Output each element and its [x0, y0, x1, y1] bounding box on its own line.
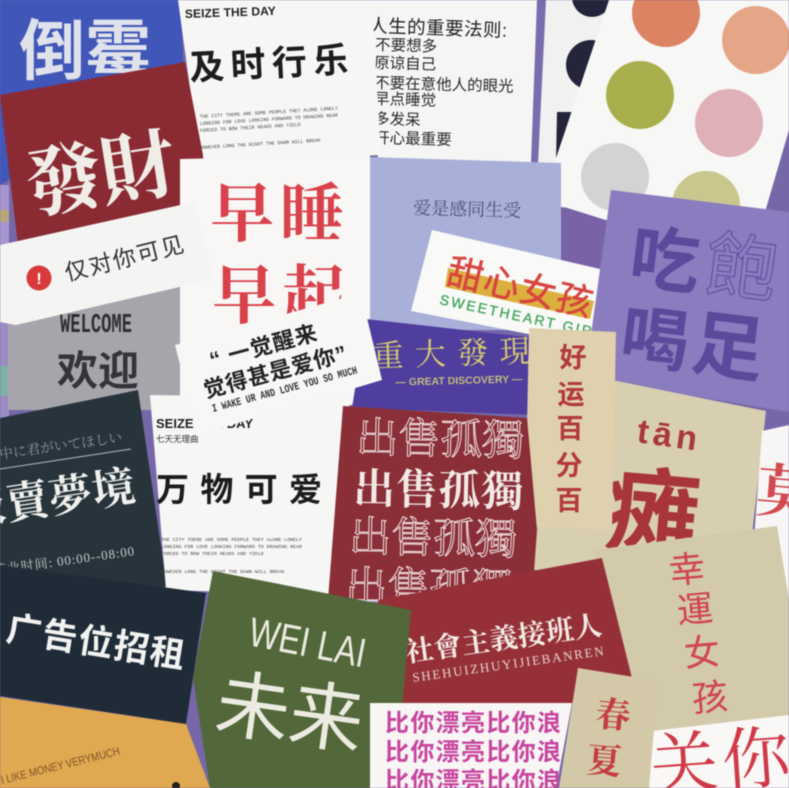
label: 七天无理曲: 七天无理曲 [156, 434, 199, 444]
text block: small print: THE CITY THERE ARE SOME PEOPLE THEY ALONE LONELY [161, 537, 302, 543]
text: vertical 好运百分百: 好 [560, 343, 586, 373]
heading: 倒霉: 倒霉 [19, 14, 151, 88]
label: SEIZE THE DAY: SEIZE THE DAY [185, 4, 276, 21]
card: white 万物可爱 [150, 395, 350, 595]
text block: rules list: 多发呆 [374, 110, 421, 129]
divider line [0, 449, 131, 469]
card: green 未来 [193, 571, 411, 788]
text: pink rows [385, 709, 561, 788]
text: I LIKE MONEY VERYMUCH: I LIKE MONEY VERYMUCH [0, 746, 121, 787]
text: I WAKE UR AND LOVE YOU SO MUCH: I WAKE UR AND LOVE YOU SO MUCH [211, 365, 359, 416]
text block: small print: HOWEVER LONG THE NIGHT THE DAWN WILL BREAK [200, 138, 321, 151]
text block: small print: LONGING FOR LOVE LOOKING FORWARD TO DRAWING NEAR [161, 544, 302, 550]
card: SEIZE THE DAY 及时行乐 [178, 0, 381, 162]
text: outline row 3: 出售孤獨 [349, 514, 518, 564]
text: 吃: 吃 [625, 218, 704, 304]
dot: orange [632, 0, 700, 47]
card: red 發財 [0, 62, 205, 245]
text: 爱是感同生受: 爱是感同生受 [413, 198, 521, 221]
heading: 重大發現: 重大發現 [372, 334, 531, 374]
text block: rules list: 开心最重要 [374, 129, 452, 149]
text: vertical 好运百分百 [556, 343, 586, 516]
card: dark teal 販賣夢境 [0, 390, 167, 590]
label: SEIZE: SEIZE THE DAY [156, 416, 253, 431]
card: red 社會主義接班人 [378, 558, 636, 705]
text: 春: 春 [594, 695, 632, 736]
text: pink rows: 比你漂亮比你浪 [385, 738, 561, 766]
text block: small print: THE CITY THERE ARE SOME PEOPLE THEY ALONE LONELY [200, 106, 338, 120]
heading: 及时行乐: 及时行乐 [188, 41, 349, 88]
text block: rules list: 不要想多 [375, 36, 437, 56]
label: WELCOME: WELCOME [60, 311, 132, 341]
heading: 早睡: 早睡 [210, 179, 344, 250]
text block: rules list [374, 36, 514, 149]
card: dark 广告位招租 [0, 565, 206, 724]
text: 一觉醒来: “ 一觉醒来 [207, 320, 320, 373]
card: tan 好运百分百 [525, 328, 616, 531]
text: pink rows: 比你漂亮比你浪 [385, 709, 561, 737]
heading: 广告位招租: 广告位招租 [4, 609, 188, 676]
text: vertical 好运百分百: 运 [558, 380, 584, 410]
card: blue 倒霉 [0, 0, 184, 185]
card: dark shapes [536, 0, 640, 212]
text block: rules list: 原谅自己 [374, 54, 436, 74]
text: solid row 2: 出售孤獨 [353, 466, 524, 516]
card: pink 比你漂亮 [370, 703, 572, 788]
label: GREAT DISCOVERY: — GREAT DISCOVERY — [395, 373, 523, 389]
heading: 万物可爱: 万物可爱 [156, 471, 322, 508]
card: orange I LIKE MONEY [0, 697, 210, 788]
text: vertical 幸運女孩: 幸 [667, 548, 707, 592]
card: coloured dots [542, 0, 789, 270]
card: white 仅对你可见 [0, 202, 214, 325]
card: white 一觉醒来 [175, 293, 382, 435]
text: tān: tān [635, 412, 700, 458]
text block: rules list: 早点睡觉 [374, 90, 436, 110]
card: red 出售孤獨 [328, 406, 537, 614]
text block: small print: FORCED TO BOW THEIR HEADS AND YIELD [200, 122, 301, 134]
text: vertical 好运百分百: 百 [556, 486, 582, 516]
dot: peach [722, 6, 789, 74]
label: SWEETHEART GIRL: SWEETHEART GIRL [438, 291, 603, 341]
card: SWEETHEART GIRL [411, 230, 603, 348]
text block: rules list: 不要在意他人的眼光 [374, 73, 514, 96]
card: tan 幸運女孩 [594, 526, 789, 733]
dot: pink [695, 89, 763, 157]
text: Japanese line: 中に君がいてほしい [0, 429, 123, 462]
dot: olive [606, 61, 674, 129]
card: purple 重大發現 [352, 319, 535, 415]
card: white right edge [740, 425, 789, 730]
text: 喝: 喝 [616, 298, 693, 382]
text: 觉得甚是爱你: 觉得甚是爱你” [201, 341, 349, 403]
card: white 早睡早起 [180, 155, 370, 405]
highlight band [445, 268, 594, 319]
text: vertical 幸運女孩: 運 [675, 588, 715, 632]
icon: red alert: ! [36, 271, 42, 288]
heading: 瘫: 瘫 [600, 458, 705, 573]
text: 仅对你可见: 仅对你可见 [62, 231, 187, 286]
text: outline row 1: 出售孤獨 [356, 415, 525, 465]
text: WEI LAI: WEI LAI [245, 609, 370, 676]
icon: dark circle middle [566, 40, 616, 90]
mark: dark blob [172, 782, 180, 788]
heading: 未来: 未来 [211, 662, 369, 764]
heading: 早起: 早起 [212, 261, 346, 332]
heading: 甜心女孩: 甜心女孩 [443, 251, 597, 324]
dot: grey [581, 143, 649, 211]
card: white 关你 [640, 715, 789, 788]
text: vertical 幸運女孩: 女 [682, 631, 722, 675]
card: rules of life [369, 0, 537, 163]
heading: 發財: 發財 [21, 122, 182, 229]
heading: 社會主義接班人: 社會主義接班人 [404, 610, 604, 669]
text: 饱 outline: 飽 [700, 225, 782, 313]
heading: 欢迎: 欢迎 [57, 348, 139, 394]
card: tan tān [532, 380, 766, 573]
text: vertical 幸運女孩: 孩 [690, 676, 730, 720]
text: outline row 4: 出售孤獨 [345, 564, 514, 614]
text: 足: 足 [687, 304, 769, 392]
text block: small print: FORCED TO BOW THEIR HEADS AND YIELD [161, 551, 264, 557]
text block: small print: HOWEVER LONG THE NIGHT THE DAWN WILL BREAK [161, 569, 284, 575]
card: grey WELCOME [8, 285, 181, 410]
text: 夏: 夏 [585, 741, 623, 782]
text: vertical 幸運女孩 [667, 548, 730, 720]
text: vertical 好运百分百: 分 [556, 451, 582, 481]
card: periwinkle 爱是感同生受 [368, 157, 561, 330]
card: purple 吃饱喝足 [585, 190, 789, 412]
text block: small print: LONGING FOR LOVE LOOKING FORWARD TO DRAWING NEAR [200, 113, 338, 127]
icon: dark circle top [572, 0, 612, 17]
icon: dark triangle [556, 112, 575, 162]
text block: small print [200, 106, 338, 151]
label: pinyin: SHEHUIZHUYIJIEBANREN [411, 643, 605, 685]
heading: rules: 人生的重要法则: [369, 15, 508, 41]
icon: red alert [26, 266, 52, 290]
text: vertical 好运百分百: 百 [556, 414, 584, 444]
dot: khaki [672, 171, 740, 239]
text block: small print [161, 537, 302, 575]
card: tan 春夏 [559, 668, 658, 788]
